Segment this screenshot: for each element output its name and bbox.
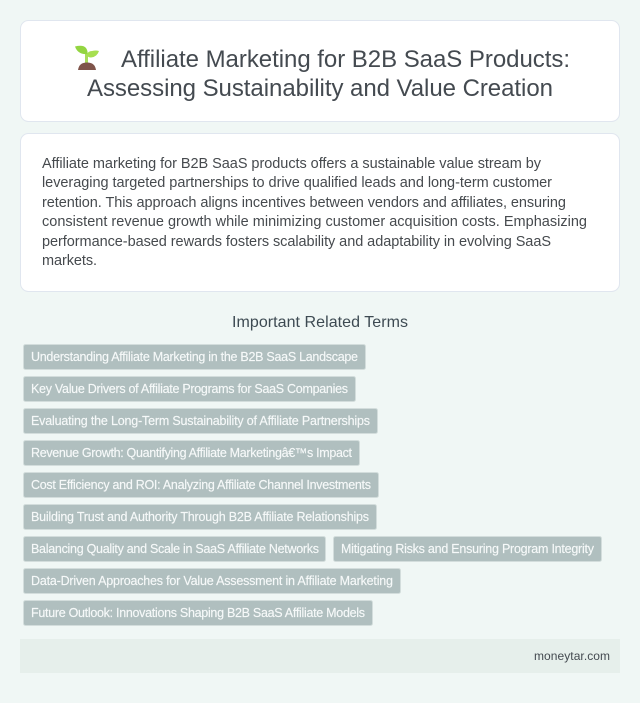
- title: Affiliate Marketing for B2B SaaS Products:: [121, 46, 570, 73]
- tag: mitigating risks: [334, 536, 602, 562]
- footer: [20, 639, 620, 673]
- title: [87, 46, 570, 102]
- tag: building trust: Building Trust and Authority Through B2B Affiliate Relationships: [31, 510, 369, 524]
- tag: cost efficiency and ROI: Cost Efficiency and ROI: Analyzing Affiliate Channel Investments: [31, 478, 371, 492]
- tag: data-driven approaches: [24, 568, 400, 594]
- tag: key value drivers: [24, 376, 356, 402]
- tag: future outlook: [24, 600, 372, 626]
- footer: moneytar.com: [534, 649, 610, 663]
- tag: key value drivers: Key Value Drivers of Affiliate Programs for SaaS Companies: [31, 382, 348, 396]
- text block: introduction paragraph: performance-based rewards fosters scalability and adaptability in evolving SaaS: [42, 234, 551, 250]
- panel: title card: [20, 20, 620, 122]
- tag: data-driven approaches: Data-Driven Approaches for Value Assessment in Affiliate Marketing: [31, 574, 393, 588]
- tag: cost efficiency and ROI: [24, 472, 378, 498]
- text block: introduction paragraph: Affiliate marketing for B2B SaaS products offers a sustainable value stream by: [42, 156, 542, 172]
- text block: introduction paragraph: leveraging targeted partnerships to drive qualified leads and long-term customer: [42, 175, 552, 191]
- text block: introduction paragraph: consistent revenue growth while minimizing customer acquisition costs. Emphasizing: [42, 214, 587, 230]
- tag: understanding affiliate marketing: Understanding Affiliate Marketing in the B2B SaaS Landscape: [31, 350, 358, 364]
- tag: long-term sustainability: Evaluating the Long-Term Sustainability of Affiliate Partnerships: [31, 414, 370, 428]
- panel: related terms tags: [24, 344, 602, 626]
- text block: introduction paragraph: retention. This approach aligns incentives between vendors and affiliates, ensuring: [42, 195, 566, 211]
- tag: building trust: [24, 504, 376, 530]
- tag: future outlook: Future Outlook: Innovations Shaping B2B SaaS Affiliate Models: [31, 606, 365, 620]
- tag: long-term sustainability: [24, 408, 378, 434]
- tag: balancing quality and scale: [24, 536, 326, 562]
- panel: introduction: [20, 134, 620, 292]
- icon: sprout: [75, 46, 99, 70]
- tag: understanding affiliate marketing: [24, 344, 366, 370]
- tag: revenue growth: Revenue Growth: Quantifying Affiliate Marketingâ€™s Impact: [31, 446, 353, 460]
- tag: balancing quality and scale: Balancing Quality and Scale in SaaS Affiliate Networks: [31, 542, 319, 556]
- tag: mitigating risks: Mitigating Risks and Ensuring Program Integrity: [341, 542, 595, 556]
- tag: revenue growth: [24, 440, 360, 466]
- text block: introduction paragraph: [42, 156, 587, 269]
- title: Assessing Sustainability and Value Creation: [87, 75, 553, 102]
- text block: introduction paragraph: markets.: [42, 253, 97, 269]
- heading: important related terms: Important Related Terms: [232, 314, 408, 331]
